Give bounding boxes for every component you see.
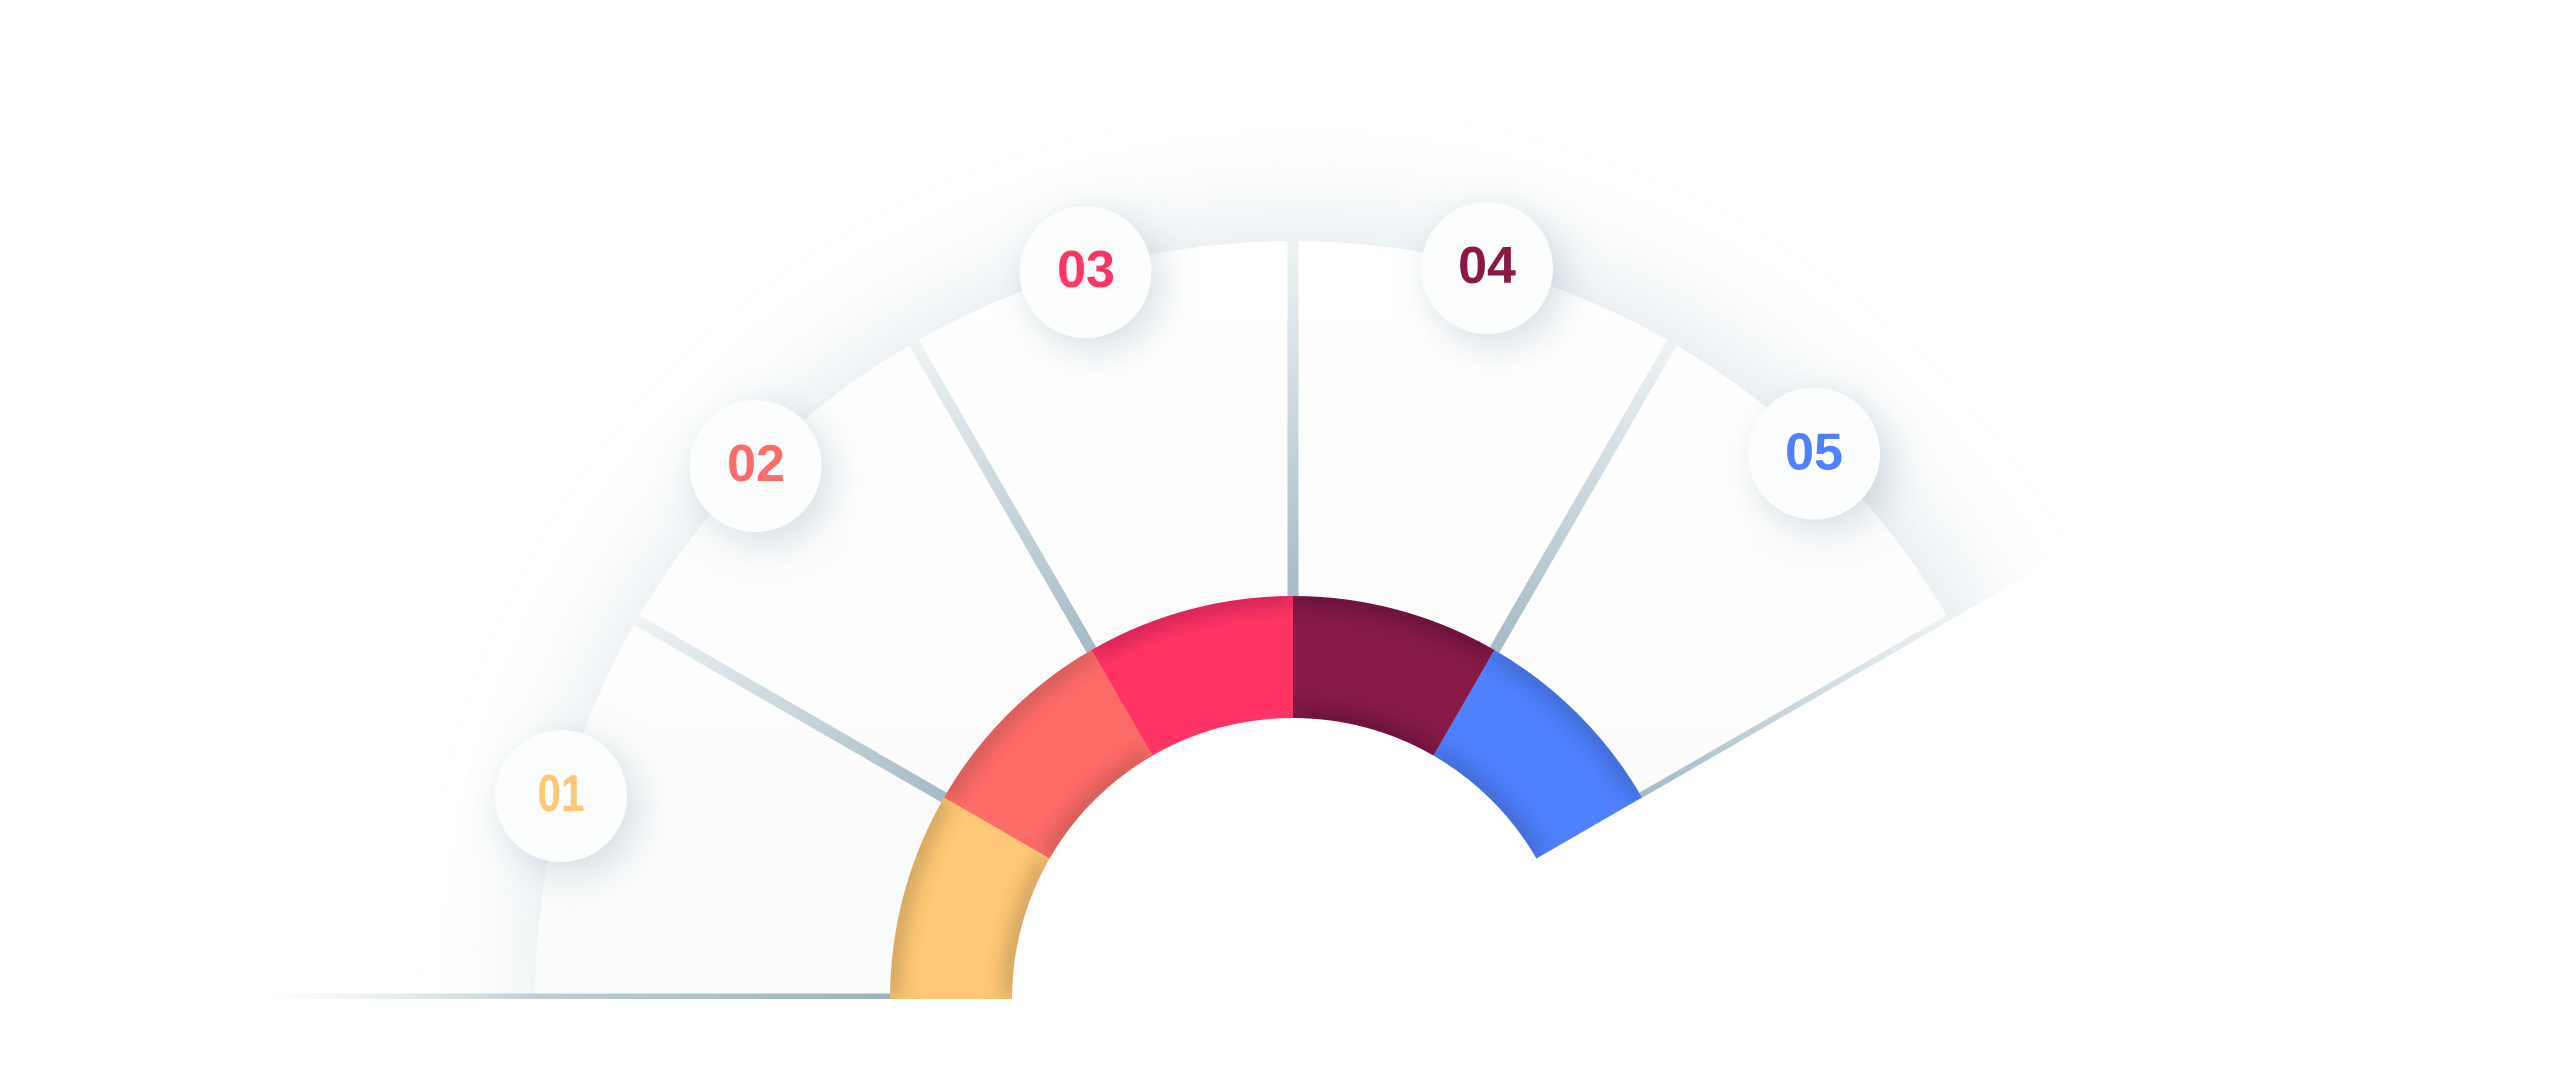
soft glow behind fan	[535, 226, 2071, 1040]
ring segment 3: pink	[1092, 596, 1293, 756]
fan of five sectors	[270, 241, 1949, 999]
badge 05: 05	[1785, 424, 1843, 482]
badge 04	[1421, 202, 1553, 334]
white hub inside the ring	[1012, 718, 1536, 999]
badge 05	[1748, 388, 1880, 520]
badge 01	[495, 730, 627, 862]
badge 02	[690, 400, 822, 532]
ring segment 1: yellow	[890, 798, 1050, 999]
ring segment 4: maroon	[1293, 596, 1494, 756]
badge 02: 02	[727, 435, 785, 493]
badge 01: 01	[538, 765, 584, 823]
spoke lines between sectors	[270, 241, 1949, 999]
badge 04: 04	[1458, 237, 1516, 295]
badge 03	[1020, 206, 1152, 338]
ring segment 5: blue	[1434, 650, 1642, 858]
ring segment 2: coral	[944, 650, 1152, 858]
badge 03: 03	[1057, 241, 1115, 299]
